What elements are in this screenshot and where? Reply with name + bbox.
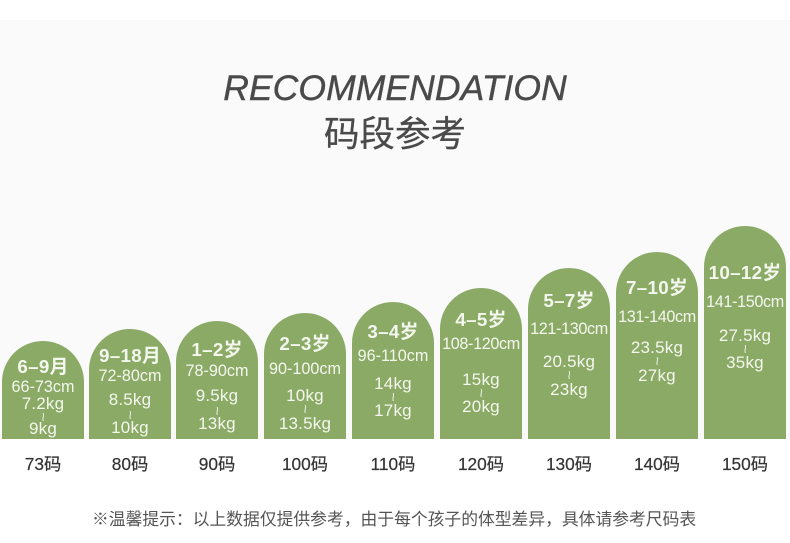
size column: 140: ~ xyxy=(650,356,665,366)
size label row: 140码 xyxy=(634,454,680,474)
size label row: 130码 xyxy=(546,454,592,474)
size column: 90: 1–2岁 xyxy=(191,339,243,360)
size column: 90: ~ xyxy=(210,406,225,416)
size column: 110: 3–4岁 xyxy=(367,321,419,342)
size column: 130 xyxy=(528,268,610,439)
size column: 90: 13kg xyxy=(198,414,236,433)
size column: 73: 7.2kg xyxy=(22,394,64,413)
size column: 73: 66-73cm xyxy=(12,378,74,396)
size label row: 80码 xyxy=(112,454,148,474)
background panel xyxy=(0,20,790,439)
size column: 80: 8.5kg xyxy=(109,390,151,409)
size column: 150: 27.5kg xyxy=(719,326,771,345)
size label row: 100码 xyxy=(282,454,328,474)
size column: 150: 10–12岁 xyxy=(709,262,781,283)
size column: 120: 15kg xyxy=(462,370,500,389)
size label row: 73码 xyxy=(25,454,61,474)
size column: 100 xyxy=(264,313,346,439)
size column: 150: ~ xyxy=(738,344,753,354)
size column: 110: 14kg xyxy=(374,374,412,393)
size column: 100: 10kg xyxy=(286,386,324,405)
size column: 100: 2–3岁 xyxy=(279,333,331,354)
size column: 130: 20.5kg xyxy=(543,352,595,371)
size column: 110 xyxy=(352,302,434,439)
size column: 120: ~ xyxy=(474,388,489,398)
size label row: 110码 xyxy=(371,454,415,474)
size column: 130: 5–7岁 xyxy=(543,290,595,311)
title: english: RECOMMENDATION xyxy=(223,68,567,108)
size column: 100: ~ xyxy=(298,404,313,414)
size column: 150: 35kg xyxy=(726,353,764,372)
size column: 140: 27kg xyxy=(638,366,676,385)
size column: 120: 20kg xyxy=(462,397,500,416)
size column: 80 xyxy=(89,329,171,439)
size column: 130: 23kg xyxy=(550,380,588,399)
size column: 100: 13.5kg xyxy=(279,414,331,433)
size column: 150: 141-150cm xyxy=(706,293,784,311)
size column: 150 xyxy=(704,226,786,439)
size label row: 90码 xyxy=(199,454,235,474)
size column: 120: 108-120cm xyxy=(442,335,520,353)
size column: 140 xyxy=(616,252,698,439)
size column: 140: 7–10岁 xyxy=(626,277,688,298)
size column: 140: 131-140cm xyxy=(618,308,696,326)
size column: 140: 23.5kg xyxy=(631,338,683,357)
size column: 90: 9.5kg xyxy=(196,386,238,405)
size column: 110: 96-110cm xyxy=(358,347,428,365)
size column: 80: 10kg xyxy=(111,418,149,437)
size column: 100: 90-100cm xyxy=(269,360,341,378)
size column: 73: 9kg xyxy=(29,419,57,438)
size label row: 120码 xyxy=(458,454,504,474)
size column: 80: 9–18月 xyxy=(99,345,161,366)
size column: 80: ~ xyxy=(123,410,138,420)
size column: 120 xyxy=(440,288,522,439)
size column: 90 xyxy=(176,321,258,439)
size column: 110: ~ xyxy=(386,392,401,402)
title: chinese: 码段参考 xyxy=(324,114,466,154)
footnote: ※温馨提示：以上数据仅提供参考，由于每个孩子的体型差异，具体请参考尺码表 xyxy=(92,510,696,529)
size column: 73: ~ xyxy=(36,412,51,422)
size column: 80: 72-80cm xyxy=(98,367,161,385)
size column: 73: 6–9月 xyxy=(17,356,69,377)
size label row: 150码 xyxy=(722,454,768,474)
size column: 130: 121-130cm xyxy=(530,320,608,338)
size column: 73 xyxy=(2,341,84,439)
size column: 120: 4–5岁 xyxy=(455,309,507,330)
size column: 130: ~ xyxy=(562,370,577,380)
size column: 90: 78-90cm xyxy=(186,362,248,380)
size column: 110: 17kg xyxy=(374,401,412,420)
